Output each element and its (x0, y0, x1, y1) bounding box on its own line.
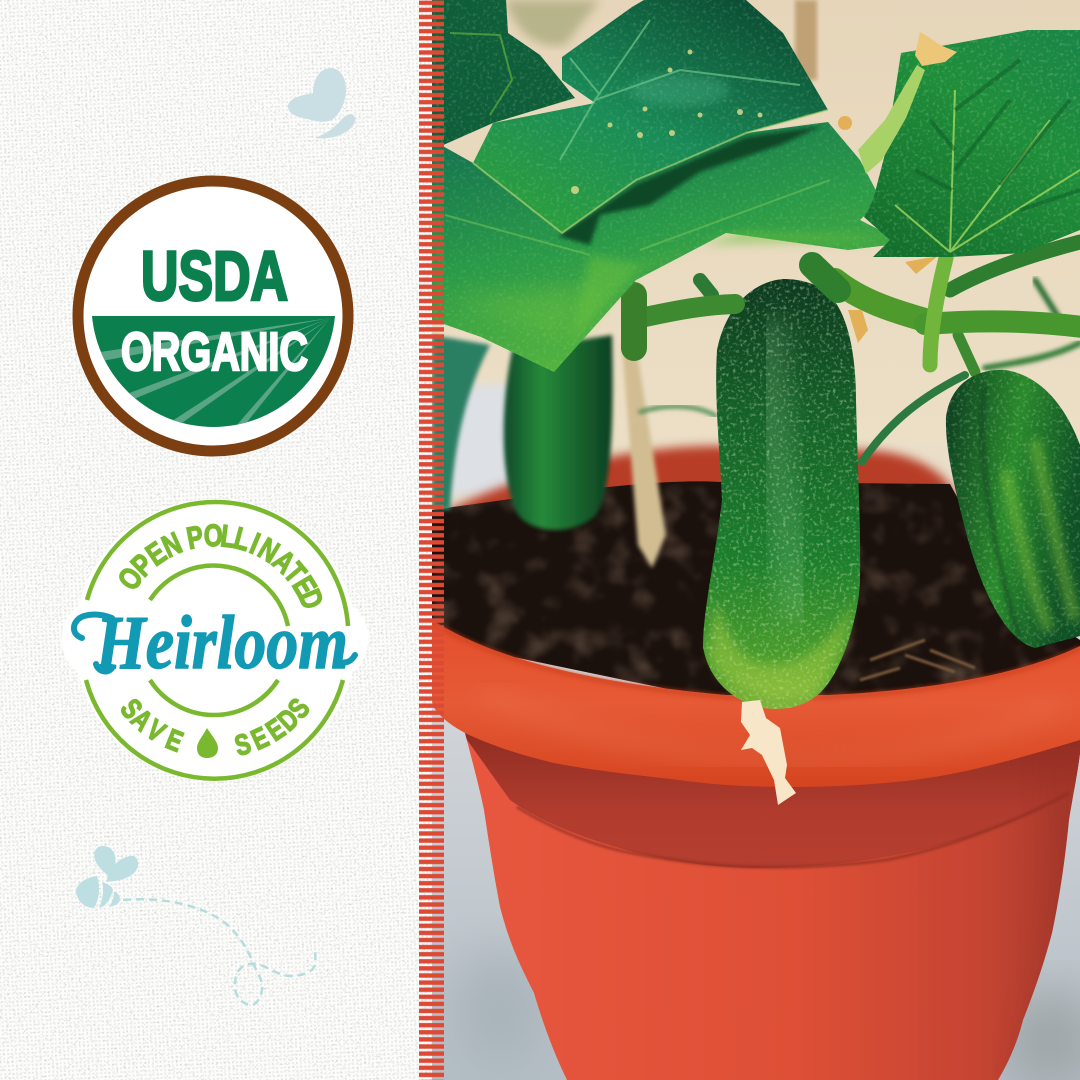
dashed flight path (123, 899, 315, 1005)
pot rim (432, 620, 1080, 787)
SEEDS curved label: E (246, 720, 274, 757)
leaf: right (864, 30, 1080, 257)
panel: linen fabric background (0, 0, 432, 1080)
SEEDS curved label: S (281, 692, 316, 725)
red stripe border (419, 0, 444, 1080)
OPEN POLLINATED curved label: O (203, 518, 223, 553)
SEEDS curved label: E (260, 711, 291, 748)
OPEN POLLINATED curved label: L (219, 518, 238, 554)
SAVE curved label: S (114, 692, 149, 725)
SEEDS curved label (231, 692, 316, 762)
pot body (460, 730, 1080, 1080)
left low leaf (432, 335, 490, 510)
main stems (634, 258, 1080, 365)
OPEN POLLINATED curved label: E (286, 570, 324, 602)
green rings (86, 502, 348, 779)
badge: USDA Organic (78, 181, 348, 451)
back pot rim (448, 438, 958, 508)
OPEN POLLINATED curved label: A (266, 543, 302, 580)
leaf: top left dark (432, 0, 575, 150)
soil (432, 481, 1080, 700)
panel: cucumber plant photograph (432, 0, 1080, 1080)
OPEN POLLINATED curved label: D (292, 584, 331, 614)
right cucumber (946, 370, 1080, 648)
USDA wordmark: USDA (141, 237, 288, 315)
SEEDS curved label: D (271, 702, 305, 737)
background cucumber (504, 335, 613, 530)
OPEN POLLINATED curved label: T (277, 556, 313, 590)
SEEDS curved label: S (231, 726, 254, 762)
leaf: lower wide (432, 122, 905, 372)
OPEN POLLINATED curved label: O (111, 561, 150, 596)
icon: butterfly (288, 68, 355, 138)
OPEN POLLINATED curved label: P (184, 519, 206, 556)
white sticker backing (62, 499, 368, 781)
light leaf stalk (858, 65, 925, 174)
badge: Heirloom open pollinated (62, 499, 368, 781)
SAVE curved label: V (141, 712, 172, 749)
pot upper band (460, 730, 1080, 868)
SAVE curved label (114, 692, 188, 758)
bee wings and body (76, 846, 138, 908)
OPEN POLLINATED curved label: I (245, 526, 265, 561)
OPEN POLLINATED curved label (111, 518, 331, 614)
green field half circle (92, 316, 335, 427)
thin stems (640, 242, 1080, 462)
SAVE curved label: E (161, 722, 188, 758)
field rays (100, 318, 330, 436)
SAVE curved label: A (125, 702, 160, 738)
OPEN POLLINATED curved label: N (252, 531, 285, 570)
central cucumber (703, 279, 860, 709)
icon: bee with dashed flight path (76, 846, 315, 1005)
leaf: top centre (473, 0, 828, 233)
plant stake (622, 345, 666, 568)
orange flowers (838, 116, 938, 343)
ORGANIC wordmark: ORGANIC (121, 322, 308, 382)
dried blossom (741, 700, 796, 805)
OPEN POLLINATED curved label: L (230, 520, 254, 558)
Heirloom script wordmark: Heirloom (95, 601, 348, 685)
yellow blossom (915, 32, 957, 66)
OPEN POLLINATED curved label: P (124, 547, 160, 583)
icon: seed drop (197, 728, 218, 758)
OPEN POLLINATED curved label: N (157, 525, 187, 564)
OPEN POLLINATED curved label: E (140, 535, 172, 572)
